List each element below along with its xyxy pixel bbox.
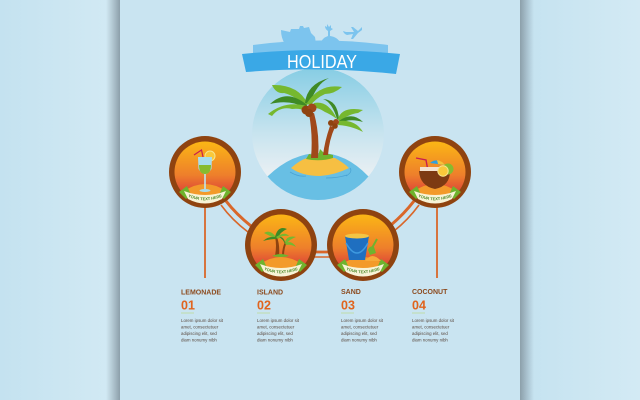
badge: sand — [327, 209, 399, 281]
icon: ship, palm and plane silhouette — [281, 24, 362, 44]
ribbon back band — [253, 40, 388, 55]
column: lemonade: adipiscing elit, sed — [181, 331, 217, 336]
column: island: diam nonumy nibh — [257, 338, 293, 342]
column: island — [257, 290, 300, 342]
column: lemonade: Lorem ipsum dolor sit — [181, 318, 224, 323]
column: sand: 03 — [341, 298, 355, 312]
column: coconut: COCONUT — [412, 289, 448, 296]
icon: palm island — [263, 228, 296, 257]
column: island: adipiscing elit, sed — [257, 331, 293, 336]
ribbon with heading — [242, 50, 400, 74]
column: sand: adipiscing elit, sed — [341, 331, 377, 336]
connectors between badges — [205, 201, 437, 278]
badge: lemonade — [169, 136, 241, 208]
icon: bucket and spade — [345, 234, 381, 261]
column: coconut — [412, 289, 455, 342]
column: coconut: adipiscing elit, sed — [412, 331, 448, 336]
column: island: ISLAND — [257, 290, 283, 296]
big circle island scene — [252, 68, 384, 200]
column: sand: Lorem ipsum dolor sit — [341, 318, 384, 323]
island illustration — [268, 78, 363, 178]
column: coconut: 04 — [412, 298, 426, 312]
badge: island — [245, 209, 317, 281]
column: lemonade: amet, consectetuer — [181, 324, 219, 330]
icon: coconut drink — [416, 158, 454, 189]
heading: HOLIDAY — [287, 52, 357, 72]
badge: coconut — [399, 136, 471, 208]
column: sand: amet, consectetuer — [341, 324, 379, 330]
icon: cocktail glass — [194, 150, 215, 192]
column: lemonade — [181, 290, 224, 342]
column: sand: diam nonumy nibh — [341, 338, 377, 342]
column: island: 02 — [257, 298, 271, 312]
column: sand — [341, 289, 384, 342]
column: coconut: diam nonumy nibh — [412, 338, 448, 342]
column: lemonade: LEMONADE — [181, 290, 221, 296]
column: coconut: Lorem ipsum dolor sit — [412, 318, 455, 323]
column: island: amet, consectetuer — [257, 324, 295, 330]
column: island: Lorem ipsum dolor sit — [257, 318, 300, 323]
column: coconut: amet, consectetuer — [412, 324, 450, 330]
column: lemonade: 01 — [181, 298, 195, 312]
column: sand: SAND — [341, 289, 361, 296]
column: lemonade: diam nonumy nibh — [181, 338, 217, 342]
